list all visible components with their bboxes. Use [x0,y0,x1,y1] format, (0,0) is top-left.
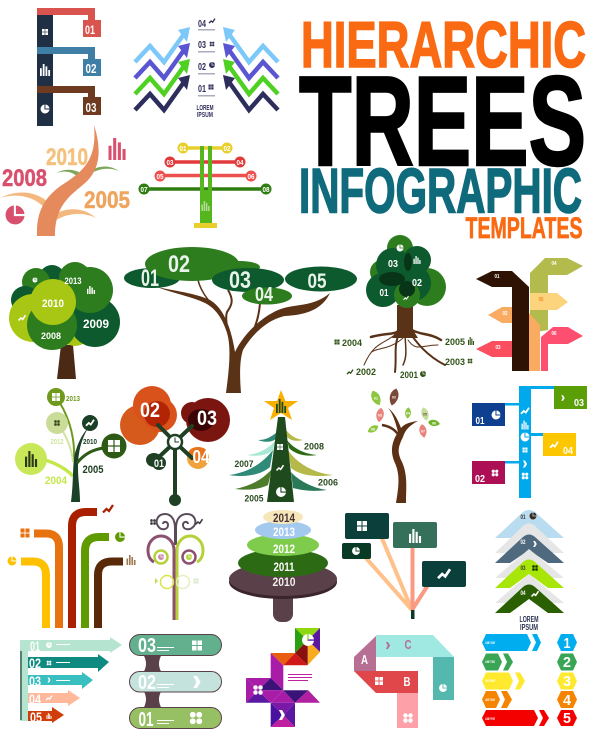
panel: star-topped pine tree: 2006 [318,478,338,488]
panel: zigzag arrows: 04 [198,19,206,30]
panel: branching circle tree: 2004 [45,475,68,487]
panel: lollipop signpost tree: 07 [140,187,148,194]
panel: arrow list: 02 [29,655,41,671]
panel: ribbon path: A [361,652,368,667]
panel: stacked disc tree: 2011 [274,560,295,574]
panel: zigzag arrows: IPSUM [197,112,213,119]
panel: lollipop signpost tree: 05 [156,174,164,181]
panel: blue bracket tree: 03 [574,398,584,409]
panel: chevron stack [495,510,564,632]
panel: chevron stack: 03 [520,566,526,572]
panel: signpost arrows: 03 [496,345,501,351]
panel: rooted tree: 2005 [445,337,465,347]
panel: ribbon path: C [404,637,412,652]
panel: rooted tree: 2001 [400,370,418,380]
panel: arrow list [20,637,122,725]
panel: blue bracket tree [472,386,587,498]
panel: hexagon numbered arrows: LINE TWO [485,660,495,664]
panel: connected pills: 03 [138,635,156,657]
panel: lollipop signpost tree: 02 [224,146,231,153]
panel: lollipop signpost tree: 04 [236,160,244,167]
panel: connected pills: 01 [138,709,154,731]
panel: connected pills [130,634,222,731]
panel: F-shaped banner tree [37,8,101,126]
panel: hexagon numbered arrows: 5 [563,710,571,727]
panel: bubble canopy tree: 2010 [42,298,64,310]
panel: hexagon numbered arrows: LINE FOUR [485,698,495,702]
panel: stacked disc tree: 2013 [273,525,295,539]
panel: leaf tree: 06 [432,422,436,426]
panel: fan diagram [342,513,466,619]
panel: four-circle pinwheel tree: 03 [197,407,217,430]
panel: hexagon numbered arrows: 3 [563,673,571,690]
panel: curved year tree: 2010 [46,144,88,171]
panel: hexagon numbered arrows: LINE FIVE [485,717,495,721]
panel: F-shaped banner tree: 02 [86,61,96,76]
panel: rooted tree: 01 [380,288,389,299]
panel: branching circle tree: 2013 [66,396,80,403]
panel: leaf tree: 04 [406,412,410,416]
panel: swirl tree [148,514,203,620]
panel: leaf tree: 03 [378,414,382,418]
panel: leaf tree: 02 [392,396,396,400]
panel: zigzag arrows: 02 [198,62,206,73]
panel: bubble canopy tree: 2009 [83,317,109,331]
panel: F-shaped banner tree: 01 [85,23,95,37]
panel: acacia tree [124,247,357,393]
panel: hexagon numbered arrows: 1 [564,635,570,652]
panel: leaf tree: 08 [371,428,375,432]
panel: bubble canopy tree: 2013 [64,276,82,286]
panel: lollipop signpost tree [138,142,272,228]
panel: chevron stack: LOREM [520,615,539,624]
panel: F-shaped banner tree: 03 [86,100,96,115]
panel: leaf tree: 05 [423,412,427,416]
panel: connected pills: 02 [138,672,156,694]
panel: blue bracket tree: 01 [476,416,485,427]
panel: hexagon numbered arrows: LINE THREE [485,679,495,683]
panel: lollipop signpost tree: 01 [180,146,187,153]
panel: four-circle pinwheel tree: 02 [140,399,160,422]
panel: acacia tree: 03 [229,267,251,294]
panel: four-circle pinwheel tree: 04 [192,447,210,467]
panel: branching circle tree: 2010 [83,439,97,446]
panel: rooted tree [334,235,474,380]
panel: signpost arrows: 01 [494,274,500,280]
panel: acacia tree: 05 [308,270,327,293]
panel: branching circle tree [15,388,126,502]
panel: arrow list: 05 [30,709,42,725]
panel: lollipop signpost tree: 08 [262,187,270,194]
panel: chevron stack: 01 [520,515,526,521]
panel: rooted tree: 2002 [356,367,376,377]
panel: stacked disc tree: 2012 [273,542,295,556]
panel: rooted tree: 2004 [342,338,362,348]
panel: star-topped pine tree: 2008 [304,442,324,452]
panel: bent pipes [8,505,136,628]
panel: rooted tree: 2003 [445,357,465,367]
panel: curved year tree [0,125,130,236]
panel: arrow list: 03 [29,673,41,689]
panel: star-topped pine tree [229,390,338,504]
panel: branching circle tree: 2005 [82,464,104,476]
panel: hexagon numbered arrows: 4 [563,692,572,709]
panel: signpost arrows: 02 [502,311,508,317]
panel: hexagon numbered arrows: LINE ONE [485,641,495,645]
panel: ribbon path: B [404,674,410,689]
panel: signpost arrows [476,258,583,371]
panel: chevron stack: 02 [520,540,526,546]
panel: stacked disc tree: 2010 [272,575,296,589]
panel: leaf tree: 07 [421,430,425,434]
panel: origami cross [246,628,320,727]
panel: hexagon numbered arrows: 2 [563,654,571,671]
panel: signpost arrows: 04 [552,261,557,267]
panel: chevron stack: 04 [520,591,526,597]
panel: chevron stack: IPSUM [520,623,538,632]
panel: curved year tree: 2008 [2,165,47,192]
panel: bubble canopy tree [9,262,120,379]
panel: curved year tree: 2005 [84,187,130,214]
panel: rooted tree: 02 [412,278,422,289]
panel: rooted tree: 03 [388,259,398,270]
panel: signpost arrows: 06 [552,331,557,337]
panel: zigzag arrows: 03 [198,40,206,51]
panel: star-topped pine tree: 2007 [234,459,254,469]
panel: hexagon numbered arrows [482,634,577,727]
panel: acacia tree: 02 [168,251,190,278]
panel: bubble canopy tree: 2008 [41,331,61,342]
panel: zigzag arrows: 01 [198,84,206,95]
panel: four-circle pinwheel tree: 01 [154,458,164,470]
panel: leaf tree: 01 [374,396,378,400]
panel: branching circle tree: 2012 [50,439,64,446]
panel: stacked disc tree: 2014 [273,511,295,525]
panel: ribbon path [354,635,454,728]
panel: leaf tree [366,387,440,503]
panel: arrow list: 04 [29,691,41,707]
panel: zigzag arrows: LOREM [196,105,214,112]
panel: blue bracket tree: 02 [475,474,485,485]
panel: acacia tree: 01 [141,265,159,292]
panel: stacked disc tree [229,510,337,622]
panel: blue bracket tree: 04 [563,446,573,457]
panel: lollipop signpost tree: 03 [166,160,174,167]
panel: lollipop signpost tree: 06 [248,174,255,181]
panel: signpost arrows: 05 [538,297,544,303]
panel: acacia tree: 04 [255,284,274,306]
panel: star-topped pine tree: 2005 [244,494,264,504]
panel: arrow list: 01 [30,638,40,654]
panel: four-circle pinwheel tree [120,386,230,506]
panel: zigzag arrows [135,19,278,119]
title [299,8,586,245]
